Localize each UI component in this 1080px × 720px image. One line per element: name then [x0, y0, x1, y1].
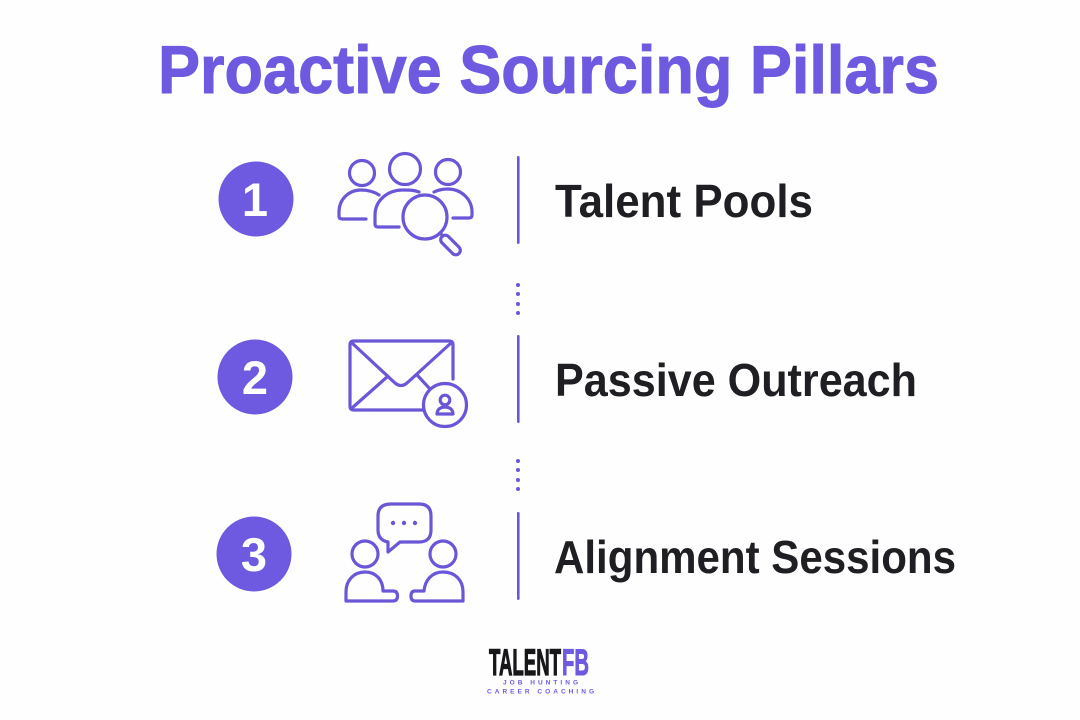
divider line 2: [517, 335, 520, 423]
label: Talent Pools: Talent Pools: [555, 175, 813, 227]
title: Proactive Sourcing Pillars: [158, 32, 939, 108]
connector dots 2: [516, 459, 520, 491]
logo: TalentFB: JOB HUNTING: [503, 680, 578, 686]
divider line 1: [517, 156, 520, 244]
label: Alignment Sessions: Alignment Sessions: [554, 531, 956, 583]
connector dots 1: [516, 283, 520, 315]
divider line 3: [517, 512, 520, 600]
label: Passive Outreach: Passive Outreach: [555, 354, 917, 406]
icon: two people talking: [346, 504, 463, 601]
icon: people with magnifying glass: [339, 154, 472, 257]
number badge 2: [218, 340, 292, 414]
pillar 2: passive outreach: [218, 335, 917, 426]
logo: TalentFB: [487, 642, 594, 696]
number badge 1: 1: [242, 173, 268, 226]
number badge 3: [216, 516, 292, 592]
number badge 1: [218, 162, 294, 236]
number badge 3: 3: [241, 528, 267, 581]
pillar 1: talent pools: [218, 154, 813, 257]
pillar 3: alignment sessions: [216, 504, 956, 601]
logo: TalentFB: TALENT: [489, 642, 561, 683]
icon: envelope with person: [350, 341, 466, 426]
logo: TalentFB: CAREER COACHING: [487, 688, 594, 696]
logo: TalentFB: FB: [562, 642, 589, 683]
number badge 2: 2: [242, 351, 268, 404]
